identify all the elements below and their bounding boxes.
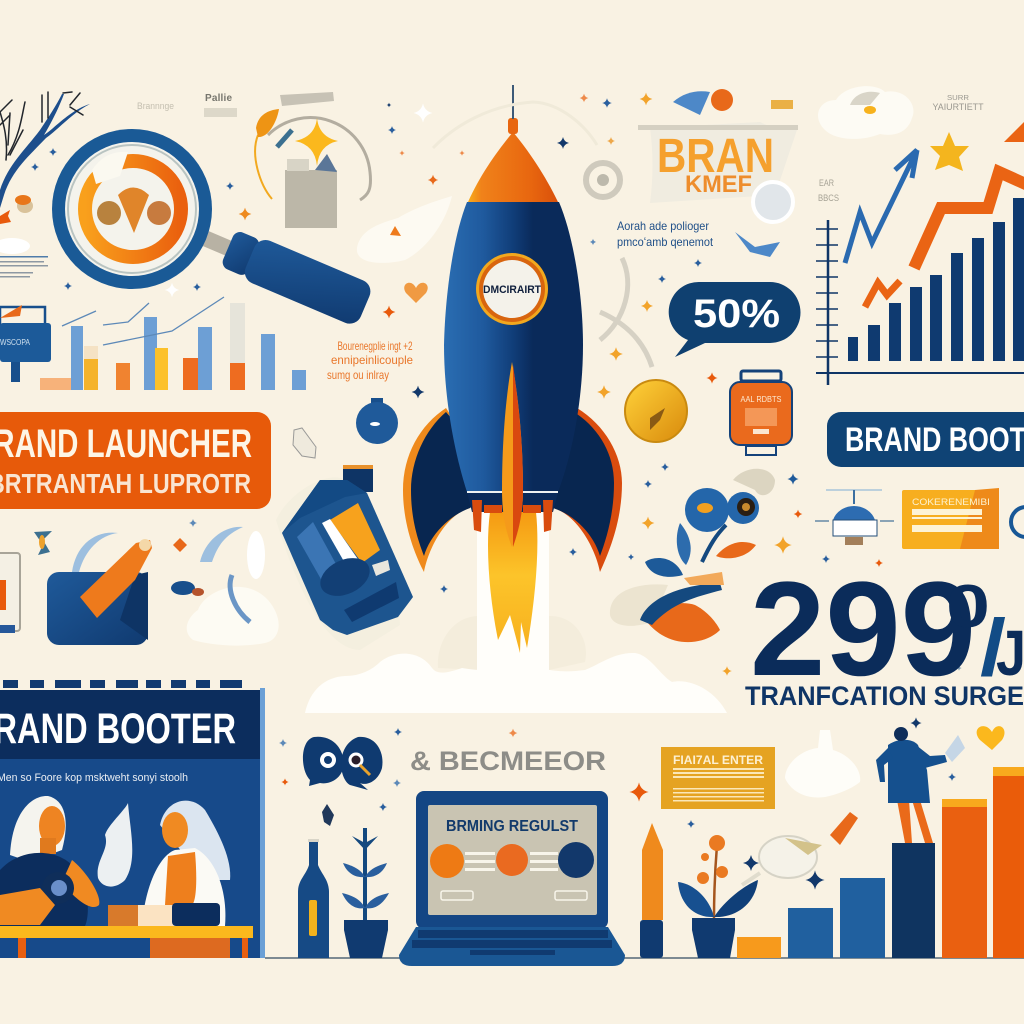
big stat: 299: 299 xyxy=(750,555,976,704)
rocket centre fin xyxy=(502,362,523,547)
text block: orange caption: Bourenegplie ingt +2 xyxy=(338,339,413,353)
icon: flower with leaves xyxy=(610,469,775,642)
icon: speech bubbles with eyes xyxy=(303,737,382,790)
rocket exhaust beam xyxy=(477,508,549,676)
label: Pallie: Pallie xyxy=(205,93,232,104)
callout: yellow note: FIAI7AL ENTER xyxy=(673,753,763,767)
panel subtitle: Men so Foore kop msktweht sonyi stoolh xyxy=(0,772,188,784)
label: surr xyxy=(932,95,984,112)
big stat: 299: / xyxy=(980,603,1006,692)
label: axis note: BBCS xyxy=(818,193,839,203)
banner: brand booter xyxy=(827,412,1024,467)
icon: bird xyxy=(735,232,780,257)
icon: orange jar: AAL RDBTS xyxy=(740,395,782,404)
banner: brand launcher xyxy=(0,412,271,509)
laptop base xyxy=(399,927,625,966)
icon: pencil xyxy=(640,823,663,958)
icon: heart right xyxy=(977,726,1005,750)
panel: brand booter xyxy=(0,680,265,958)
icon: small nut and bird xyxy=(0,195,33,224)
icon: yellow form card xyxy=(902,488,999,549)
laptop screen xyxy=(428,805,597,915)
icon: grey arcs xyxy=(600,258,652,367)
brand kit banner: KMEF xyxy=(685,171,752,198)
icon: cloud with orange accent xyxy=(357,196,452,263)
orange trend arrow xyxy=(914,172,1024,268)
ground line xyxy=(265,957,1024,959)
tabletop items xyxy=(108,903,220,926)
callout: 50 percent: 50% xyxy=(693,292,780,336)
rocket porthole xyxy=(476,253,548,325)
text block: blue caption xyxy=(617,219,714,249)
icon: white cloud top right xyxy=(818,86,913,139)
brand kit banner xyxy=(638,122,798,222)
figure on pedestal xyxy=(876,727,965,843)
icon: orange diamond xyxy=(173,538,187,552)
laptop screen: BRMING REGULST xyxy=(446,818,578,835)
icon: blue swoosh and soap cloud xyxy=(171,527,279,646)
icon: blue signboard: WSCOPA xyxy=(0,338,31,347)
icon: small bird crest xyxy=(322,804,334,826)
label: axis note xyxy=(818,178,839,203)
rocket band xyxy=(467,491,558,493)
orange arrowhead xyxy=(1004,122,1024,142)
icon: gold star xyxy=(930,132,969,171)
woman right xyxy=(142,801,230,926)
chart bars xyxy=(848,198,1024,361)
rocket nose cone xyxy=(468,132,558,202)
blue trend arrow xyxy=(845,150,917,263)
icon: heart xyxy=(404,283,428,303)
icon: gold coin xyxy=(625,380,687,442)
faint label top: Brannnge xyxy=(137,101,174,111)
bar chart: bottom right xyxy=(737,767,1024,958)
decorative grey ring xyxy=(586,163,620,197)
icon: nuts in lens xyxy=(97,188,171,233)
rocket side clouds xyxy=(438,616,586,670)
woman left xyxy=(0,796,99,926)
nose tip xyxy=(508,118,518,134)
icon: bare tree xyxy=(0,92,90,208)
chart axes xyxy=(816,220,1024,385)
table xyxy=(0,926,253,958)
icon: faint outlined hand xyxy=(293,428,316,458)
steam xyxy=(98,803,132,887)
laptop xyxy=(399,791,625,966)
sparkles xyxy=(31,93,962,890)
icon: blue signboard xyxy=(0,305,51,382)
rocket body xyxy=(444,202,583,492)
icon: small magnifier and tube xyxy=(742,812,858,885)
label: axis note: EAR xyxy=(819,178,834,188)
magnifier lens xyxy=(52,129,212,289)
text block: orange caption xyxy=(327,339,413,382)
icon: clipboard xyxy=(0,553,20,633)
bar chart: growth xyxy=(816,122,1024,385)
icon: flag top xyxy=(673,89,793,115)
icon: potted plant xyxy=(342,828,389,958)
bar chart: left xyxy=(40,297,306,390)
icon: yellow form card: COKERENEMIBI xyxy=(912,497,990,507)
callout: 50 percent xyxy=(669,282,800,357)
text block: orange caption: sumg ou inlray xyxy=(327,368,389,382)
icon: blue ring xyxy=(1011,507,1024,537)
icon: box with star xyxy=(255,92,371,228)
icon: orange jar xyxy=(730,371,792,455)
icon: plant with orange buds xyxy=(678,835,758,958)
panel binder tabs xyxy=(3,680,242,688)
icon: blue ball xyxy=(356,398,398,444)
rocket left and right fins xyxy=(403,408,622,572)
text block: blue caption: Aorah ade polioger xyxy=(617,219,709,233)
text block: left small lines xyxy=(0,238,48,278)
rocket xyxy=(305,85,727,713)
icon: small figure xyxy=(34,531,52,555)
icon: bottle xyxy=(298,839,329,958)
label: surr: YAIURTIETT xyxy=(932,102,984,112)
big stat: 299: 0 xyxy=(946,573,990,640)
label: Pallie xyxy=(204,93,237,117)
decorative arc over rocket xyxy=(433,102,597,148)
text block: orange caption: ennipeinlicouple xyxy=(331,353,413,367)
brand kit banner: BRAN xyxy=(657,130,774,183)
magnifying glass xyxy=(52,129,374,327)
magnifier handle xyxy=(197,217,374,327)
icon: blue briefcase with orange tool xyxy=(47,533,152,645)
rocket nozzle xyxy=(467,492,558,532)
rocket flame xyxy=(488,512,537,653)
callout: yellow note xyxy=(661,747,775,809)
icon: drone xyxy=(815,489,894,545)
rocket porthole: DMCIRAIRT xyxy=(483,284,541,296)
panel header xyxy=(0,690,260,759)
label: surr: SURR xyxy=(947,95,969,102)
small orange zigzag xyxy=(865,281,900,307)
heading: and becmeeor: & BECMEEOR xyxy=(410,746,606,776)
icon: blue device xyxy=(276,465,413,650)
rocket clouds xyxy=(305,653,727,713)
laptop lid xyxy=(416,791,608,929)
antenna xyxy=(512,85,514,119)
icon: white cloth xyxy=(785,730,860,798)
text block: blue caption: pmcoʻamb qenemot xyxy=(617,235,714,249)
